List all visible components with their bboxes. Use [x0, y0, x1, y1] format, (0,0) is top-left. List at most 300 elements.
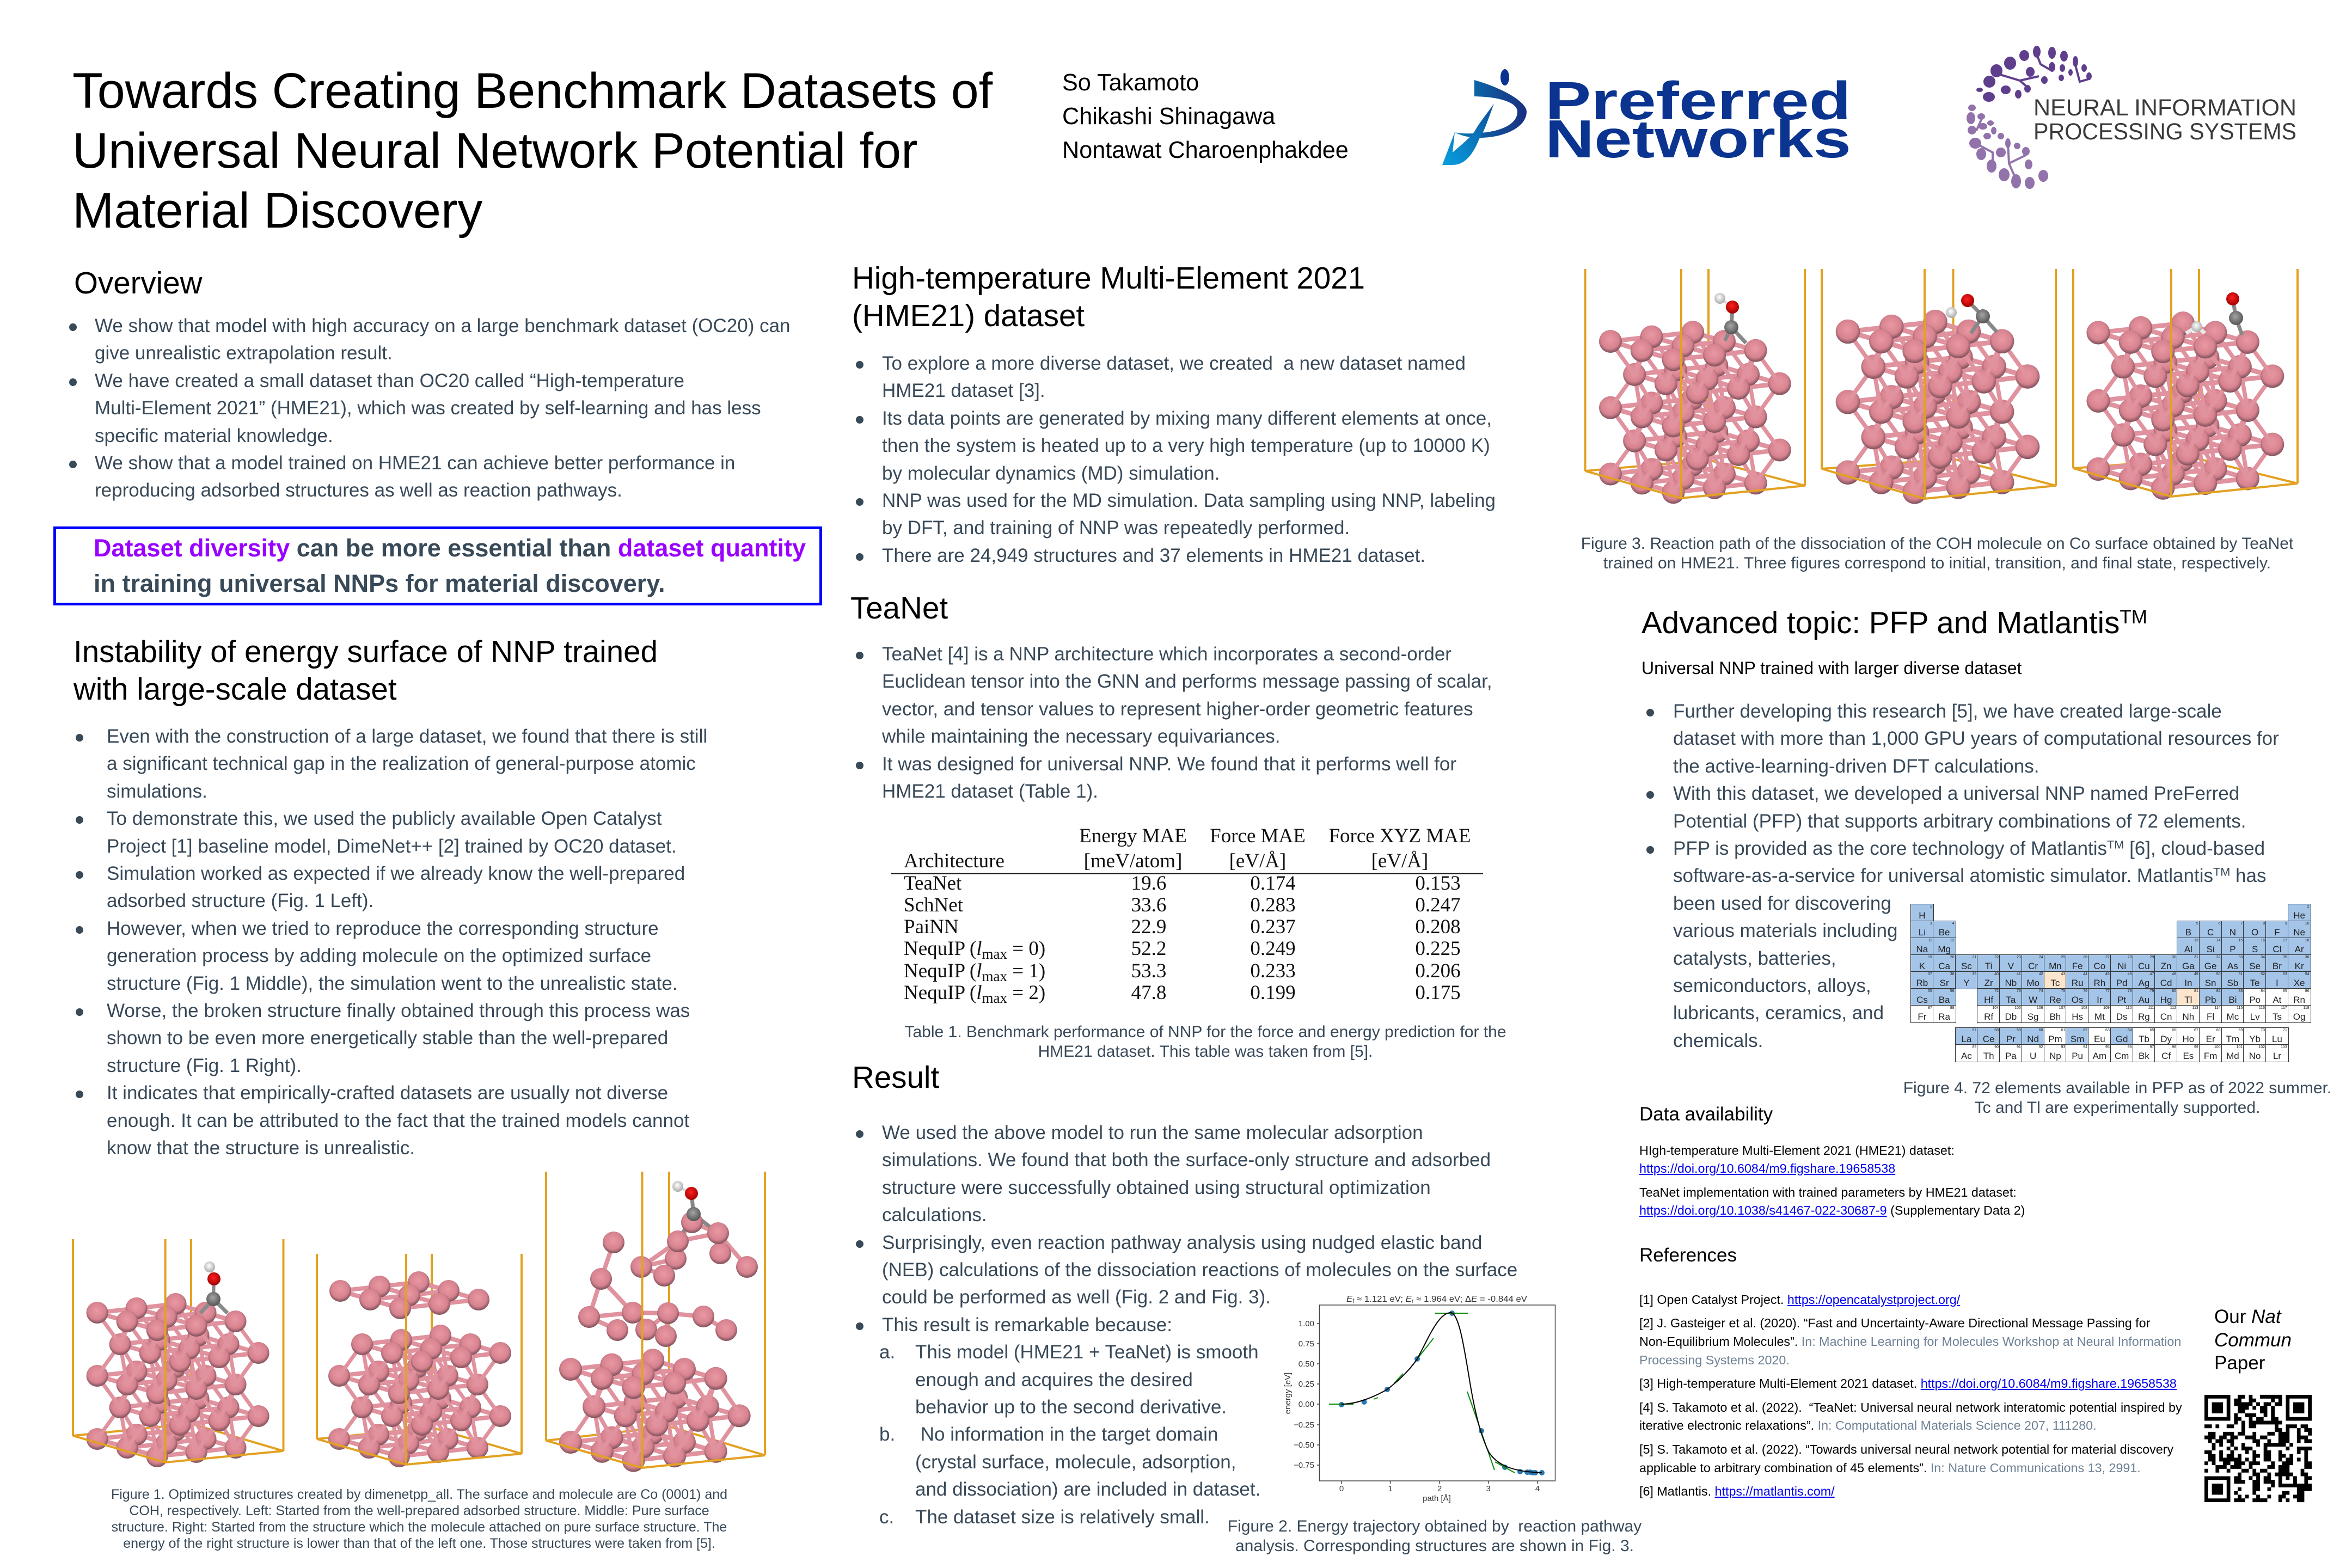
main table: 117 [2281, 1006, 2287, 1010]
lanthanide and actinide rows: 63 [2105, 1028, 2110, 1032]
text block: references [1639, 1291, 2195, 1501]
main table: Rf [1984, 1012, 1993, 1022]
main table: 38 [1950, 972, 1955, 976]
chart title: E [1406, 1295, 1412, 1304]
y axis labels: 0.00 [1298, 1400, 1314, 1409]
y axis labels: 1.00 [1298, 1319, 1314, 1328]
main table: Hf [1984, 995, 1993, 1005]
main table [1911, 904, 2311, 1022]
text block: result bullets: b. [879, 1424, 895, 1445]
lanthanide and actinide rows: Ac [1961, 1051, 1972, 1061]
main table: 25 [2061, 955, 2065, 959]
main table: Mc [2227, 1012, 2239, 1022]
main table: Ta [2006, 995, 2016, 1005]
main table: 35 [2283, 955, 2287, 959]
main table: 20 [1950, 955, 1955, 959]
y axis labels: −0.25 [1294, 1420, 1314, 1430]
main table: Be [1939, 927, 1950, 938]
main table: Ra [1938, 1012, 1950, 1022]
text block: data availability links: HIgh-temperature Multi-Element 2021 (HME21) dataset: [1639, 1143, 1955, 1157]
text block: result bullets: We used the above model to run the same molecular adsorption [882, 1122, 1423, 1143]
lanthanide and actinide rows: 98 [2172, 1045, 2176, 1049]
main table: Ne [2293, 927, 2305, 938]
figure 3 caption: Figure 3. Reaction path of the dissociation of the COH molecule on Co surface obtained by TeaNet [1581, 535, 2293, 553]
x axis labels: 4 [1535, 1484, 1540, 1493]
main table: 32 [2216, 955, 2220, 959]
text block: advanced topic bullets [1673, 698, 2279, 1055]
table 1: benchmark performance: 0.237 [1250, 916, 1296, 938]
lanthanide and actinide rows: 68 [2216, 1028, 2220, 1032]
table 1: benchmark performance: 47.8 [1131, 982, 1166, 1004]
main table: 31 [2194, 955, 2198, 959]
lanthanide and actinide rows: 65 [2149, 1028, 2154, 1032]
main table: 85 [2283, 989, 2287, 993]
x axis labels: energy [eV] [1283, 1373, 1293, 1414]
heading: Overview: Overview [74, 266, 202, 300]
lanthanide and actinide rows: Fm [2204, 1051, 2217, 1061]
table 1 caption: Table 1. Benchmark performance of NNP for the force and energy prediction for the [904, 1023, 1506, 1041]
text block: advanced topic bullets: With this dataset, we developed a universal NNP named PreFerred [1673, 783, 2239, 804]
lanthanide and actinide rows: Dy [2160, 1034, 2172, 1044]
text: our Nat Commun paper: Commun [2214, 1330, 2292, 1350]
main table: 113 [2192, 1006, 2198, 1010]
table 1: benchmark performance: max [982, 990, 1008, 1006]
text block: instability bullets: enough. It can be attributed to the fact that the trained models cannot [107, 1110, 689, 1131]
heading: advanced topic: Advanced topic: PFP and MatlantisTM [1641, 605, 2147, 640]
text block: TeaNet bullets: It was designed for universal NNP. We found that it performs well for [882, 754, 1456, 775]
main table: 106 [2037, 1006, 2043, 1010]
lanthanide and actinide rows: Es [2183, 1051, 2194, 1061]
main table: 83 [2238, 989, 2243, 993]
text block: advanced topic bullets: chemicals. [1673, 1030, 1763, 1051]
main table: Rh [2094, 978, 2105, 988]
text block: references: Processing Systems 2020. [1639, 1353, 1790, 1367]
authors: So Takamoto [1062, 70, 1199, 96]
lanthanide and actinide rows: Pm [2048, 1034, 2062, 1044]
main table: 77 [2105, 989, 2110, 993]
main table: Mo [2026, 978, 2039, 988]
main table: Kr [2295, 961, 2304, 971]
text block: result bullets: Surprisingly, even reaction pathway analysis using nudged elastic band [882, 1232, 1483, 1253]
lanthanide and actinide rows: 97 [2149, 1045, 2154, 1049]
main table: Se [2249, 961, 2261, 971]
main table: 47 [2149, 972, 2154, 976]
main table: Cs [1916, 995, 1928, 1005]
main table: 52 [2261, 972, 2265, 976]
title [72, 63, 993, 238]
lanthanide and actinide rows: Ce [1983, 1034, 1994, 1044]
text block: overview bullets: We have created a small dataset than OC20 called “High-temperature [95, 370, 684, 391]
main table: B [2185, 927, 2191, 938]
main table: 116 [2259, 1006, 2265, 1010]
table 1: benchmark performance: Force XYZ MAE [1328, 825, 1471, 847]
main table: Zr [1984, 978, 1993, 988]
lanthanide and actinide rows: 95 [2105, 1045, 2110, 1049]
text block: HME21 bullets: HME21 dataset [3]. [882, 380, 1045, 401]
lanthanide and actinide rows [1956, 1028, 2288, 1062]
text block: instability bullets: Worse, the broken structure finally obtained through this process was [107, 1000, 690, 1021]
y axis labels [1294, 1319, 1314, 1470]
main table: 82 [2216, 989, 2220, 993]
main table: 46 [2128, 972, 2132, 976]
main table: 5 [2196, 922, 2198, 926]
text block: TeaNet bullets: TeaNet [4] is a NNP architecture which incorporates a second-order [882, 644, 1451, 665]
callout text [94, 534, 806, 597]
lanthanide and actinide rows: Bk [2139, 1051, 2149, 1061]
table 1: benchmark performance: Force MAE [1210, 825, 1306, 847]
text block: TeaNet bullets: Euclidean tensor into the GNN and performs message passing of scalar, [882, 671, 1492, 692]
text block: instability bullets: know that the structure is unrealistic. [107, 1137, 415, 1159]
text block: references: [3] High-temperature Multi-Element 2021 dataset. https://doi.org/10.6084/m9.figshare.19658538 [1639, 1376, 2177, 1391]
text block: result bullets: a. [879, 1342, 895, 1363]
main table: 18 [2305, 939, 2310, 942]
main table: 33 [2238, 955, 2243, 959]
main table: 105 [2014, 1006, 2021, 1010]
main table: 111 [2148, 1006, 2154, 1010]
table 1: benchmark performance: 0.153 [1415, 872, 1461, 895]
main table: Lv [2250, 1012, 2260, 1022]
table 1: benchmark performance: Architecture [904, 850, 1004, 872]
figure 2 caption [1217, 1517, 1652, 1556]
callout: key message [53, 526, 822, 605]
text block: HME21 bullets: To explore a more diverse dataset, we created a new dataset named [882, 353, 1466, 374]
text block: TeaNet bullets [856, 644, 1492, 802]
lanthanide and actinide rows: Lr [2273, 1051, 2281, 1061]
lanthanide and actinide rows: 89 [1972, 1045, 1976, 1049]
main table: 56 [1950, 989, 1955, 993]
lanthanide and actinide rows: Pr [2006, 1034, 2016, 1044]
text: our Nat Commun paper: Our Nat [2214, 1306, 2281, 1327]
main table: 10 [2305, 922, 2310, 926]
main table: 36 [2305, 955, 2310, 959]
chart title: ≈ 1.121 eV; [1354, 1295, 1406, 1304]
main table: Nh [2182, 1012, 2194, 1022]
logo: Neural Information Processing Systems: NEURAL INFORMATION [2033, 95, 2296, 121]
main table: Sn [2205, 978, 2216, 988]
lanthanide and actinide rows: 71 [2283, 1028, 2287, 1032]
main table: Rn [2293, 995, 2305, 1005]
heading: HME21 dataset: (HME21) dataset [852, 298, 1085, 333]
main table: Hs [2072, 1012, 2083, 1022]
logo: Preferred Networks [1442, 69, 1851, 169]
main table: N [2230, 927, 2236, 938]
lanthanide and actinide rows: Lu [2272, 1034, 2282, 1044]
main table: Cu [2138, 961, 2150, 971]
lanthanide and actinide rows: 67 [2194, 1028, 2198, 1032]
text block: instability bullets: adsorbed structure (Fig. 1 Left). [107, 890, 373, 911]
main table: Ar [2295, 944, 2304, 954]
title: Towards Creating Benchmark Datasets of [72, 63, 993, 119]
table 1: benchmark performance: max [982, 946, 1008, 962]
main table: 53 [2283, 972, 2287, 976]
lanthanide and actinide rows: 60 [2039, 1028, 2043, 1032]
table 1: benchmark performance: 33.6 [1131, 894, 1166, 916]
x axis labels: 1 [1388, 1484, 1393, 1493]
table 1: benchmark performance: PaiNN [904, 916, 959, 938]
main table: H [1919, 910, 1926, 921]
main table: K [1919, 961, 1925, 971]
main table: 22 [1994, 955, 1999, 959]
table 1: benchmark performance: = 0) [1007, 938, 1045, 960]
main table: 84 [2261, 989, 2265, 993]
heading: references: References [1639, 1245, 1737, 1266]
y axis labels: 0.25 [1298, 1380, 1314, 1389]
x axis labels [1283, 1373, 1540, 1503]
lanthanide and actinide rows: Th [1983, 1051, 1994, 1061]
main table: 104 [1992, 1006, 1999, 1010]
main table: Re [2049, 995, 2061, 1005]
main table: 14 [2216, 939, 2220, 942]
text block: references: applicable to arbitrary combination of 45 elements”. In: Nature Communications 13, 2991. [1639, 1461, 2141, 1475]
chart title: ≈ 1.964 eV; Δ [1414, 1295, 1471, 1304]
text block: data availability links: https://doi.org/10.1038/s41467-022-30687-9 (Supplementary Data 2) [1639, 1203, 2025, 1217]
text block: result bullets: and dissociation) are included in dataset. [915, 1479, 1260, 1500]
figure 4 caption [1845, 1079, 2352, 1118]
title: Material Discovery [72, 183, 482, 238]
text block: advanced topic bullets: software-as-a-service for universal atomistic simulator. MatlantisTM has [1673, 865, 2266, 886]
text block: HME21 bullets: by DFT, and training of NNP was repeatedly performed. [882, 517, 1350, 538]
text block: result bullets: (NEB) calculations of the dissociation reactions of molecules on the surface [882, 1259, 1517, 1281]
text block: HME21 bullets: NNP was used for the MD simulation. Data sampling using NNP, labeling [882, 490, 1496, 511]
main table: 3 [1930, 922, 1932, 926]
text block: instability bullets: structure (Fig. 1 Middle), the simulation went to the unrealistic state. [107, 973, 678, 994]
text block: instability bullets: generation process by adding molecule on the optimized surface [107, 945, 651, 966]
main table: Sg [2028, 1012, 2039, 1022]
text block: instability bullets: Even with the construction of a large dataset, we found that there is still [107, 726, 707, 747]
text block: references: iterative electronic relaxations”. In: Computational Materials Science 207, 111280. [1639, 1418, 2097, 1432]
subheading: Universal NNP trained with larger diverse dataset [1641, 658, 2022, 678]
lanthanide and actinide rows: La [1961, 1034, 1971, 1044]
text block: overview bullets: specific material knowledge. [95, 425, 333, 446]
text block: result bullets: c. [879, 1506, 894, 1528]
main table: Na [1916, 944, 1928, 954]
main table: Ts [2273, 1012, 2282, 1022]
main table: 42 [2039, 972, 2043, 976]
text block: advanced topic bullets: various materials including [1673, 920, 1897, 941]
authors: Nontawat Charoenphakdee [1062, 137, 1349, 163]
main table: F [2274, 927, 2280, 938]
lanthanide and actinide rows: Er [2206, 1034, 2215, 1044]
logo: Preferred Networks: Preferred [1545, 71, 1851, 131]
main table: S [2252, 944, 2258, 954]
text block: advanced topic bullets: Further developing this research [5], we have created large-scale [1673, 701, 2222, 722]
main table: Cd [2160, 978, 2172, 988]
structure: final state [2073, 269, 2298, 500]
text block: result bullets: enough and acquires the desired [915, 1369, 1193, 1391]
text block: instability bullets: Simulation worked as expected if we already know the well-prepared [107, 863, 685, 884]
title: Universal Neural Network Potential for [72, 123, 918, 179]
table 1: benchmark performance: 0.225 [1415, 938, 1461, 960]
main table: 24 [2039, 955, 2043, 959]
main table: 6 [2219, 922, 2220, 926]
main table: Ru [2072, 978, 2083, 988]
lanthanide and actinide rows: 96 [2128, 1045, 2132, 1049]
main table: 28 [2128, 955, 2132, 959]
chart title: E = -0.844 eV [1471, 1295, 1525, 1304]
text block: advanced topic bullets: the active-learning-driven DFT calculations. [1673, 756, 2039, 777]
text block: result bullets: structure were successfully obtained using structural optimization [882, 1177, 1431, 1198]
main table: Bh [2049, 1012, 2061, 1022]
table 1: benchmark performance: 0.175 [1415, 982, 1461, 1004]
main table: 43 [2061, 972, 2065, 976]
main table: 118 [2303, 1006, 2310, 1010]
main table: He [2293, 910, 2305, 921]
text block: data availability links [1639, 1142, 2184, 1218]
figure 1 caption: Figure 1. Optimized structures created by dimenetpp_all. The surface and molecule are Co (0001) and [111, 1487, 727, 1502]
table 1: benchmark performance [891, 825, 1483, 1006]
logo: Neural Information Processing Systems [1967, 46, 2296, 189]
main table: 26 [2083, 955, 2087, 959]
y axis labels: 0.75 [1298, 1339, 1314, 1349]
main table: Ds [2116, 1012, 2128, 1022]
table 1: benchmark performance: NequIP (l [904, 960, 982, 982]
text block: instability bullets: simulations. [107, 781, 207, 802]
main table: 55 [1928, 989, 1932, 993]
main table: 114 [2214, 1006, 2220, 1010]
lanthanide and actinide rows: 58 [1994, 1028, 1999, 1032]
table 1 caption [904, 1023, 1506, 1061]
lanthanide and actinide rows: 93 [2061, 1045, 2065, 1049]
main table: 49 [2194, 972, 2198, 976]
table 1 caption: HME21 dataset. This table was taken from [5]. [1038, 1043, 1373, 1061]
y axis labels: −0.75 [1294, 1461, 1314, 1470]
main table: 15 [2238, 939, 2243, 942]
main table: Db [2005, 1012, 2017, 1022]
main table: 29 [2149, 955, 2154, 959]
table 1: benchmark performance: max [982, 968, 1008, 984]
main table: Fl [2207, 1012, 2214, 1022]
main table: 19 [1928, 955, 1932, 959]
main table: 2 [2307, 905, 2310, 909]
heading: instability: with large-scale dataset [74, 672, 397, 706]
structure: transition state [1822, 269, 2056, 504]
main table: 78 [2128, 989, 2132, 993]
main table: 16 [2261, 939, 2265, 942]
y axis labels: 0.50 [1298, 1359, 1314, 1369]
lanthanide and actinide rows: No [2249, 1051, 2261, 1061]
text block: result bullets: simulations. We found that both the surface-only structure and adsorbed [882, 1149, 1491, 1171]
figure 3: reaction path structures [1579, 264, 2308, 509]
figure 2 caption: analysis. Corresponding structures are shown in Fig. 3. [1235, 1537, 1634, 1555]
lanthanide and actinide rows: 69 [2238, 1028, 2243, 1032]
main table: P [2230, 944, 2236, 954]
text block: references: [1] Open Catalyst Project. https://opencatalystproject.org/ [1639, 1293, 1960, 1307]
main table: 74 [2039, 989, 2043, 993]
main table: Mg [1938, 944, 1951, 954]
structure: pure surface [317, 1254, 522, 1467]
figure 2 caption: Figure 2. Energy trajectory obtained by reaction pathway [1228, 1517, 1641, 1535]
lanthanide and actinide rows: Am [2093, 1051, 2106, 1061]
text block: overview bullets: We show that a model trained on HME21 can achieve better performance in [95, 452, 735, 474]
main table: Cl [2273, 944, 2281, 954]
heading: TeaNet: TeaNet [850, 591, 948, 625]
logo: Preferred Networks: Networks [1545, 109, 1851, 169]
text block: instability bullets: It indicates that empirically-crafted datasets are usually not diverse [107, 1082, 668, 1104]
table 1: benchmark performance: 52.2 [1131, 938, 1166, 960]
lanthanide and actinide rows: Gd [2116, 1034, 2128, 1044]
table 1: benchmark performance: SchNet [904, 894, 964, 916]
lanthanide and actinide rows: 64 [2128, 1028, 2132, 1032]
text block: result bullets: No information in the target domain [921, 1424, 1218, 1445]
text block: references: [6] Matlantis. https://matlantis.com/ [1639, 1484, 1835, 1498]
text block: result bullets [882, 1119, 1517, 1531]
figure 4 caption: Figure 4. 72 elements available in PFP as of 2022 summer. [1903, 1079, 2331, 1097]
main table: Rb [1916, 978, 1928, 988]
table 1: benchmark performance: Energy MAE [1079, 825, 1187, 847]
lanthanide and actinide rows: Ho [2182, 1034, 2194, 1044]
main table: 41 [2017, 972, 2021, 976]
main table: 110 [2126, 1006, 2132, 1010]
text block: instability bullets: Project [1] baseline model, DimeNet++ [2] trained by OC20 dataset. [107, 836, 677, 857]
main table: 79 [2149, 989, 2154, 993]
main table: Li [1919, 927, 1926, 938]
text block: result bullets: could be performed as well (Fig. 2 and Fig. 3). [882, 1287, 1271, 1308]
text block: advanced topic bullets: dataset with more than 1,000 GPU years of computational resources for [1673, 728, 2279, 749]
lanthanide and actinide rows: Md [2226, 1051, 2239, 1061]
figure 1 caption: structure. Right: Started from the structure which the molecule attached on pure surface structure. The [112, 1520, 727, 1535]
main table: 11 [1928, 939, 1932, 942]
main table: Pd [2116, 978, 2128, 988]
main table: C [2207, 927, 2214, 938]
main table: Br [2273, 961, 2282, 971]
lanthanide and actinide rows: 62 [2083, 1028, 2087, 1032]
authors [1062, 70, 1349, 163]
chart title: E [1346, 1295, 1353, 1304]
lanthanide and actinide rows: 61 [2061, 1028, 2065, 1032]
main table: Os [2072, 995, 2083, 1005]
main table: 108 [2081, 1006, 2087, 1010]
y axis labels: −0.50 [1294, 1441, 1314, 1450]
text block: instability bullets [76, 726, 707, 1159]
chart title: f [1352, 1298, 1355, 1304]
lanthanide and actinide rows: 99 [2194, 1045, 2198, 1049]
figure 4: periodic table of supported elements [1911, 904, 2311, 1063]
lanthanide and actinide rows: 92 [2039, 1045, 2043, 1049]
text block: data availability links: TeaNet implementation with trained parameters by HME21 dataset: [1639, 1185, 2017, 1199]
figure 1 caption [111, 1487, 727, 1551]
table 1: benchmark performance: 19.6 [1131, 872, 1166, 895]
text block: HME21 bullets: then the system is heated up to a very high temperature (up to 10000 K) [882, 435, 1490, 456]
main table: Zn [2161, 961, 2172, 971]
x axis labels: 2 [1437, 1484, 1442, 1493]
main table: 13 [2194, 939, 2198, 942]
table 1: benchmark performance: 0.249 [1250, 938, 1296, 960]
text block: HME21 bullets: There are 24,949 structures and 37 elements in HME21 dataset. [882, 545, 1425, 566]
figure 1: optimized structures [72, 1172, 766, 1472]
main table: 37 [1928, 972, 1932, 976]
main table: 115 [2237, 1006, 2243, 1010]
lanthanide and actinide rows: Yb [2249, 1034, 2261, 1044]
text block: instability bullets: a significant technical gap in the realization of general-purpose atomic [107, 753, 696, 774]
table 1: benchmark performance: 53.3 [1131, 960, 1166, 982]
lanthanide and actinide rows: Tb [2139, 1034, 2149, 1044]
main table: 54 [2305, 972, 2310, 976]
main table: As [2227, 961, 2238, 971]
text block: TeaNet bullets: while maintaining the necessary equivariances. [882, 726, 1281, 747]
heading: Result: Result [852, 1060, 939, 1094]
text block: advanced topic bullets: catalysts, batteries, [1673, 948, 1836, 969]
lanthanide and actinide rows: 57 [1972, 1028, 1976, 1032]
table 1: benchmark performance: 0.199 [1250, 982, 1296, 1004]
lanthanide and actinide rows: 102 [2258, 1045, 2265, 1049]
main table: Pb [2205, 995, 2216, 1005]
main table: 87 [1928, 1006, 1932, 1010]
main table: 76 [2083, 989, 2087, 993]
main table: Ca [1938, 961, 1950, 971]
table 1: benchmark performance: 22.9 [1131, 916, 1166, 938]
main table: Rg [2138, 1012, 2150, 1022]
lanthanide and actinide rows: Nd [2027, 1034, 2039, 1044]
